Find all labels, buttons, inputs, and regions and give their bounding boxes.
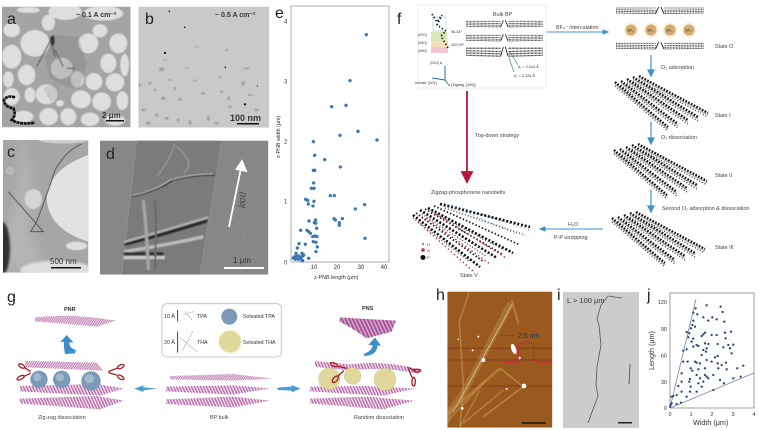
x axis title: Width (μm) (693, 418, 728, 427)
scale bar c (51, 267, 81, 268)
legend labels: Solvated THA (243, 340, 276, 346)
label: PNS: PNS (362, 306, 374, 312)
label: H2O: H₂O (568, 222, 578, 228)
crystal cell (431, 14, 448, 53)
legend labels: 20 Å (164, 339, 175, 346)
crystal labels: d₁ = 2.244 Å (518, 64, 539, 69)
x tick labels: 0 (668, 412, 672, 418)
panel letter b: b (145, 11, 154, 28)
legend box (162, 304, 281, 357)
panel letter c: c (7, 144, 15, 161)
x tick labels: 1 (689, 412, 693, 418)
y tick labels: 3 (284, 80, 288, 86)
label: Top-down strategy: Top-down strategy (475, 133, 519, 139)
label: 2.5 nm: 2.5 nm (518, 333, 540, 340)
x tick labels: 10 (311, 265, 318, 271)
x tick labels (311, 265, 388, 271)
label: PNR: PNR (64, 307, 76, 313)
label: O2 adsorption: O₂ adsorption (661, 65, 694, 71)
scale bar b (237, 123, 259, 124)
panel c: TEM image with folded nanobelt (3, 140, 88, 273)
scale bar a (106, 120, 124, 122)
legend H O P (420, 242, 430, 260)
x tick labels: 40 (381, 265, 388, 271)
arrow: BF4 intercalation (547, 30, 608, 34)
legend labels: TPA (197, 314, 207, 320)
axes arrows (432, 66, 448, 84)
PNS sheet (339, 317, 396, 338)
random layers (310, 361, 420, 409)
label: O2 dissociation: O₂ dissociation (661, 135, 697, 141)
crystal labels: d₂ = 2.224 Å (514, 73, 535, 78)
arrow: O2 adsorption (648, 55, 654, 76)
x tick labels: 30 (358, 265, 365, 271)
panel letter j: j (646, 287, 651, 304)
panel a: TEM image of holey carbon film (2, 3, 131, 127)
y tick labels: 2 (284, 140, 288, 146)
legend labels (164, 313, 276, 346)
label: State III: State III (715, 245, 734, 251)
panel f: BP to zigzag nanobelt mechanism (397, 5, 750, 279)
legend labels: Solvated TPA (243, 314, 275, 320)
y tick labels: 90 (661, 327, 667, 333)
y tick labels: 60 (661, 354, 667, 360)
arrow: [100] direction (229, 161, 246, 227)
y tick labels: 0 (664, 406, 667, 412)
label: Zig-zag dissociation: Zig-zag dissociation (38, 415, 86, 421)
scale bar i (618, 422, 632, 424)
panel letter h: h (436, 287, 445, 304)
label: current density b: ~ 0.5 A cm⁻² (215, 12, 256, 19)
arrow: to random (278, 385, 301, 392)
panel letter e: e (275, 5, 284, 22)
image background (563, 292, 639, 428)
BF4 ions: BF₄ (666, 28, 673, 32)
scissors left (16, 363, 31, 381)
State I (615, 76, 708, 131)
y tick labels: 0 (284, 260, 288, 266)
data points (292, 33, 379, 262)
y tick labels (284, 20, 288, 266)
crystal labels (415, 30, 539, 87)
BF4 ions (624, 22, 696, 38)
panel letter a: a (7, 11, 16, 28)
State O (616, 7, 733, 50)
y tick labels: 30 (661, 380, 667, 386)
BF4 ions: BF₄ (686, 28, 692, 32)
legend H O P: P (427, 255, 430, 260)
label: State II: State II (715, 173, 732, 179)
legend labels: THA (197, 340, 208, 346)
legend labels: 10 Å (164, 313, 175, 320)
y tick labels: 1 (284, 200, 288, 206)
crystal labels: mchair, [001] (415, 81, 437, 85)
arrow: O2 dissociation (648, 122, 654, 144)
scissors random right (407, 367, 421, 386)
label: Zigzag-phosphorene nanobelts: Zigzag-phosphorene nanobelts (431, 190, 506, 196)
solvated TPA balls (30, 371, 101, 391)
y axis title: z-PNB width (μm) (276, 115, 282, 158)
short nanobelt (629, 364, 630, 384)
x tick labels: 2 (710, 412, 714, 418)
scale bar d (224, 267, 264, 269)
crystal labels: (060) (418, 49, 428, 53)
y tick labels: 4 (284, 20, 288, 26)
label: State O: State O (715, 44, 733, 50)
zig-zag layers (20, 361, 124, 409)
bulk layers (166, 374, 273, 407)
label: State V: State V (460, 273, 478, 279)
axes frame (670, 293, 754, 408)
crystal labels: 102.09° (451, 43, 465, 47)
panel b: TEM image with nanoparticles (138, 7, 269, 128)
State III (612, 212, 705, 267)
label: Random dissociation: Random dissociation (354, 415, 404, 421)
plot frame (291, 6, 389, 262)
label: BP bulk: BP bulk (210, 415, 229, 421)
x tick labels (668, 412, 756, 418)
y tick labels (658, 300, 667, 412)
data points (669, 304, 744, 408)
label: 2 µm: 2 μm (102, 111, 121, 120)
State II (614, 144, 707, 199)
x tick labels: 4 (752, 412, 756, 418)
panel i: optical image of long nanobelt (557, 287, 639, 428)
crystal labels: (020) (418, 33, 428, 37)
height profile (502, 342, 552, 362)
panel letter f: f (397, 11, 402, 28)
arrow: to zig-zag (134, 385, 157, 392)
panel letter d: d (106, 146, 115, 163)
State V (413, 203, 530, 272)
crystal labels: (010) b (430, 61, 442, 65)
solvated THA balls (319, 368, 396, 390)
long nanobelt (588, 296, 622, 423)
x tick labels: 20 (334, 265, 341, 271)
d spacing pointers (509, 52, 518, 72)
x axis title: z-PNB length (μm) (314, 275, 359, 281)
panel g: TPA / THA dissociation schematic (7, 289, 421, 421)
label: BF4 intercalation: BF₄⁻ intercalation (556, 25, 599, 31)
label: second O2 adsorption and dissociation: Second O₂ adsorption & dissociation (662, 206, 750, 212)
scissors random left (330, 362, 347, 384)
label: Bulk BP: Bulk BP (493, 12, 513, 18)
crystal labels: 96.34° (451, 30, 463, 34)
label: [100]: [100] (238, 191, 246, 209)
y tick labels: 120 (658, 300, 667, 306)
BF4 ions: BF₄ (628, 28, 634, 32)
layered BP structure (466, 20, 543, 56)
label: current density a: ~ 0.1 A cm⁻² (76, 12, 117, 19)
panel h: AFM image of nanobelts (436, 287, 552, 428)
BF4 ions: BF₄ (648, 28, 654, 32)
legend H O P: H (427, 242, 430, 247)
y axis title: Length (μm) (647, 331, 656, 370)
label: 1 µm: 1 μm (233, 256, 251, 265)
arrow: up to PNS (363, 337, 381, 356)
boundary lines (670, 299, 754, 408)
label: P-P unzipping: P-P unzipping (554, 235, 587, 241)
x tick labels: 3 (731, 412, 735, 418)
label: 500 nm: 500 nm (50, 257, 77, 266)
crystal labels: a (Zigzag, [100]) (448, 83, 476, 87)
scissors right (108, 364, 125, 381)
panel j: scatter plot of length vs width (646, 287, 756, 427)
label: 100 nm: 100 nm (230, 113, 261, 123)
panel letter i: i (557, 287, 561, 304)
panel letter g: g (7, 289, 16, 306)
crystal labels: (040) (418, 41, 428, 45)
arrow: up to PNR (60, 335, 76, 354)
arrow: H2O P-P unzipping (540, 227, 603, 231)
label: L > 100 um: L > 100 μm (567, 296, 605, 305)
arrow: second O2 step (648, 190, 654, 212)
box: bulk BP structure (415, 5, 546, 88)
PNR sheet (35, 316, 116, 327)
panel e: scatter plot of z-PNB width vs length (275, 5, 389, 281)
label: State I: State I (715, 113, 731, 119)
legend H O P: O (427, 248, 430, 253)
panel d: TEM image with [100] direction (100, 141, 268, 275)
arrow: top-down strategy (462, 91, 472, 182)
